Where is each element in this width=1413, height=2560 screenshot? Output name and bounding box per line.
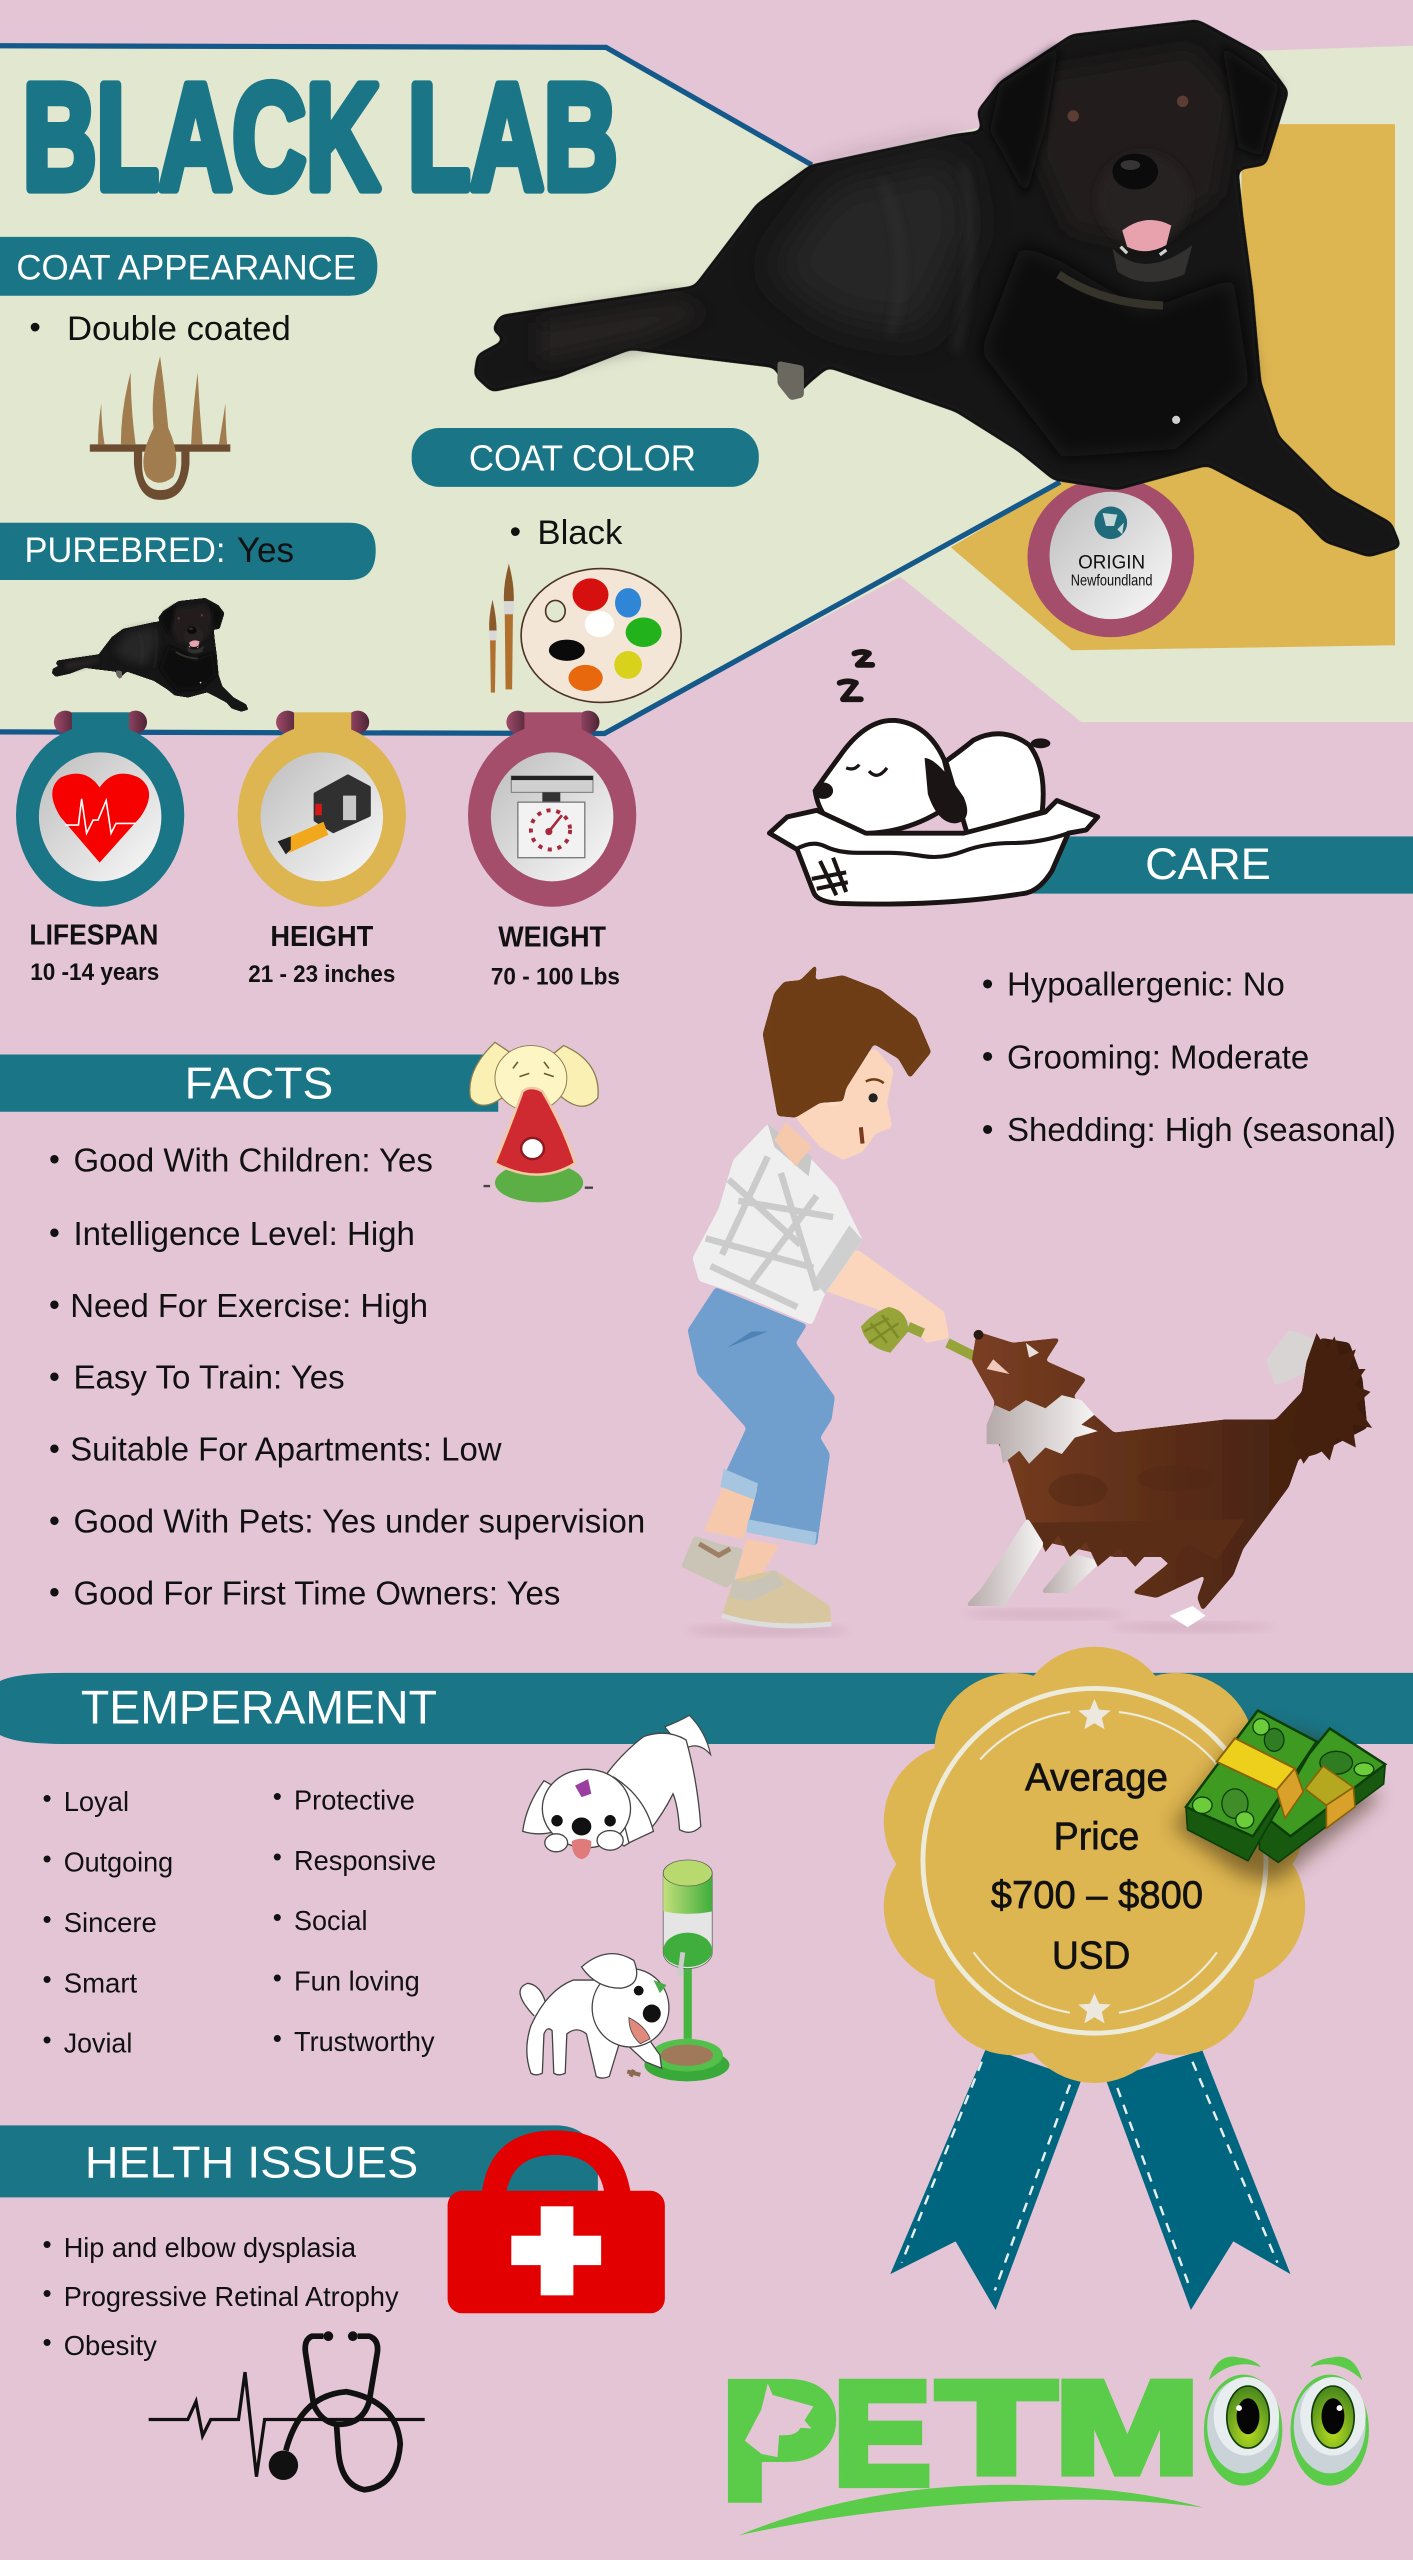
icon: ribbon tails (890, 2047, 1290, 2310)
text: health issues list: • (42, 2229, 52, 2259)
text: care list: Grooming: Moderate (1007, 1039, 1309, 1076)
logo: PETMOO: E (833, 2352, 931, 2516)
text: temperament column 1: • (42, 1783, 52, 1813)
icon: playful white puppy (523, 1715, 711, 1859)
icon: small black lab (52, 598, 248, 712)
text: black: Black (537, 514, 623, 552)
text: temperament column 2: Responsive (294, 1845, 436, 1876)
text: facts list: • (49, 1142, 60, 1177)
icon: stethoscope with heartbeat (149, 2331, 425, 2490)
icon: water feeder and bowl (644, 1860, 729, 2081)
text: facts list: • (49, 1575, 60, 1610)
label: height: HEIGHT (270, 921, 374, 953)
text: average price: Average (1025, 1757, 1168, 1800)
panel: coat color heading (412, 428, 759, 487)
text: facts list: Intelligence Level: High (74, 1216, 415, 1253)
text: care list: • (982, 1111, 993, 1148)
text: temperament column 2: • (273, 1963, 282, 1993)
text: facts list: • (49, 1359, 60, 1394)
text: health issues list: • (42, 2327, 52, 2357)
logo: PETMOO: M (1055, 2355, 1199, 2501)
panel: purebred heading (0, 523, 376, 580)
panel: coat appearance heading: COAT APPEARANCE (16, 248, 356, 287)
text: black: • (510, 512, 521, 549)
illustration: large black labrador (474, 20, 1402, 557)
text: facts list: • (49, 1215, 60, 1250)
text: temperament column 1: Loyal (64, 1786, 129, 1817)
panel: purebred heading: Yes (237, 531, 294, 570)
text: facts list: • (49, 1287, 60, 1322)
label: height (248, 921, 395, 988)
text: temperament column 1: • (42, 1843, 52, 1873)
text: facts list: Suitable For Apartments: Low (70, 1432, 502, 1469)
text: facts list: Good For First Time Owners: Yes (74, 1575, 560, 1612)
label: lifespan (29, 919, 159, 986)
label: weight (491, 922, 620, 990)
panel: gold block behind dog (951, 124, 1395, 650)
panel: facts heading (0, 1055, 498, 1112)
text: care list: • (982, 966, 993, 1003)
text: average price (991, 1757, 1203, 1978)
text: temperament column 2: Fun loving (294, 1966, 420, 1997)
logo: PETMOO: P (720, 2347, 838, 2535)
title: BLACK LAB (23, 53, 617, 221)
badge: origin: ORIGIN (1078, 552, 1145, 574)
text: temperament column 1: • (42, 2025, 52, 2055)
label: weight: WEIGHT (498, 922, 607, 954)
icon: paint brushes (489, 564, 514, 693)
text: facts list: • (49, 1503, 60, 1538)
icon: eating white puppy (520, 1954, 669, 2078)
text: temperament column 2: • (273, 1902, 282, 1932)
panel: temperament heading: TEMPERAMENT (81, 1682, 437, 1735)
text: care list (982, 966, 1396, 1149)
badge: origin: Newfoundland (1071, 573, 1152, 590)
text: average price: $700 – $800 (991, 1874, 1203, 1917)
text: facts list: Good With Children: Yes (74, 1142, 433, 1179)
panel: facts heading: FACTS (185, 1060, 333, 1109)
text: health issues list: Progressive Retinal Atrophy (64, 2281, 399, 2312)
panel: cream hexagon background (0, 46, 1413, 734)
text: temperament column 2: Trustworthy (294, 2026, 435, 2057)
text: health issues list: Hip and elbow dysplasia (64, 2232, 357, 2263)
text: health issues list: Obesity (64, 2330, 157, 2361)
panel: coat color heading: COAT COLOR (469, 438, 696, 479)
text: double coated: Double coated (67, 310, 291, 348)
text: facts list: • (49, 1431, 60, 1466)
text: health issues list (42, 2229, 399, 2361)
text: care list: Hypoallergenic: No (1007, 967, 1285, 1004)
text: average price: Price (1054, 1815, 1139, 1858)
badge: height (238, 711, 406, 907)
text: temperament column 2: • (273, 2023, 282, 2053)
text: health issues list: • (42, 2278, 52, 2308)
text: facts list (49, 1142, 645, 1612)
panel: care heading (1021, 836, 1413, 894)
icon: paint palette (521, 569, 681, 702)
label: height: 21 - 23 inches (248, 962, 395, 988)
label: weight: 70 - 100 Lbs (491, 964, 620, 990)
text: facts list: Good With Pets: Yes under supervision (74, 1503, 645, 1540)
text: temperament column 2 (273, 1781, 436, 2057)
text: temperament column 1: Smart (64, 1967, 137, 1998)
text: temperament column 1: • (42, 1964, 52, 1994)
text: temperament column 1: Outgoing (64, 1846, 173, 1877)
label: lifespan: LIFESPAN (29, 919, 158, 951)
icon: bunny with meat (470, 1042, 598, 1202)
text: temperament column 2: Social (294, 1905, 368, 1936)
logo: PETMOO (720, 2347, 1369, 2535)
decorative outline: blue edge (0, 46, 1060, 734)
icon: sleeping dog in basket (769, 652, 1098, 904)
badge: origin (1027, 477, 1194, 637)
text: facts list: Easy To Train: Yes (74, 1360, 345, 1397)
text: double coated: • (29, 308, 41, 345)
text: average price: USD (1052, 1935, 1130, 1978)
panel: health issues heading (0, 2125, 598, 2197)
panel: care heading: CARE (1145, 840, 1271, 889)
icon: hair follicle (90, 356, 230, 500)
badge: average price seal (884, 1647, 1305, 2083)
text: care list: Shedding: High (seasonal) (1007, 1112, 1396, 1149)
text: care list: • (982, 1039, 993, 1076)
icon: first aid kit (448, 2130, 665, 2313)
text: temperament column 1: Jovial (64, 2028, 132, 2059)
badge: weight (468, 711, 636, 907)
panel: temperament heading (0, 1673, 1413, 1744)
badge: lifespan (16, 711, 184, 907)
text: temperament column 2: Protective (294, 1784, 415, 1815)
panel: health issues heading: HELTH ISSUES (85, 2139, 418, 2188)
panel: purebred heading: PUREBRED: (25, 531, 225, 570)
label: lifespan: 10 -14 years (30, 960, 159, 986)
logo: PETMOO: T (938, 2355, 1055, 2501)
icon: rope toy (861, 1307, 1000, 1369)
text: temperament column 1: • (42, 1904, 52, 1934)
text: facts list: Need For Exercise: High (70, 1288, 428, 1325)
panel: coat appearance heading (0, 237, 377, 296)
text: temperament column 1 (42, 1783, 173, 2059)
icon: stacks of money (1173, 1710, 1385, 1882)
text: temperament column 2: • (273, 1842, 282, 1872)
illustration: brown and white dog (964, 1330, 1372, 1631)
illustration: boy playing tug (681, 964, 949, 1635)
text: temperament column 1: Sincere (64, 1907, 157, 1938)
text: temperament column 2: • (273, 1781, 282, 1811)
